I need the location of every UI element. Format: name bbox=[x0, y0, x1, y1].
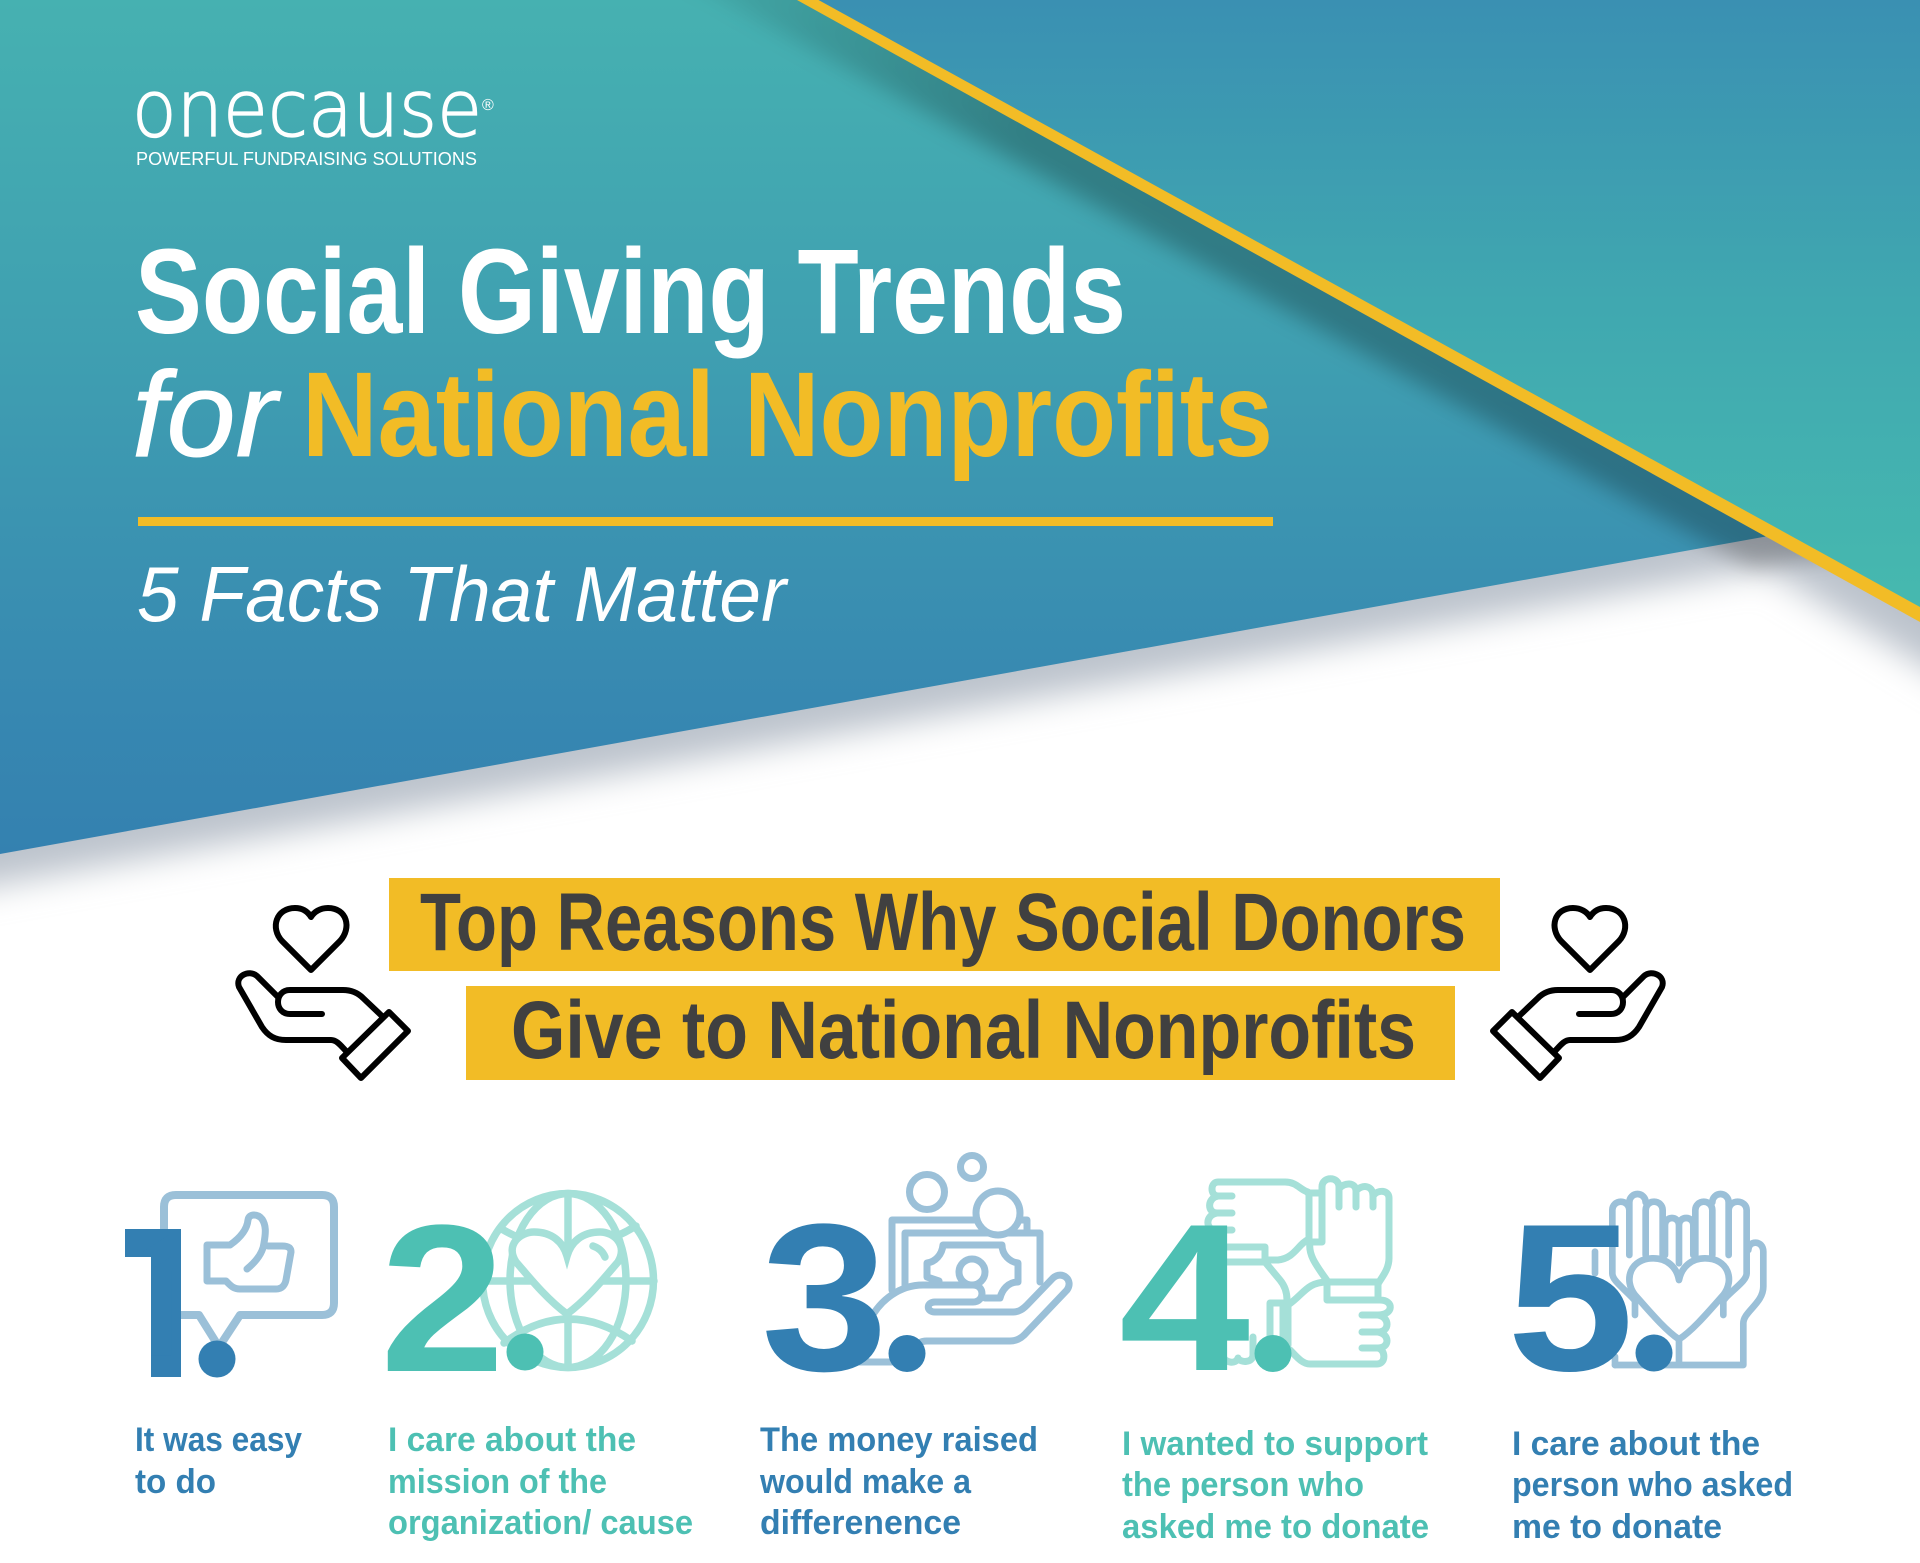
numeral 1: 1 bbox=[122, 1187, 239, 1422]
numeral 2: 2 bbox=[380, 1181, 505, 1416]
dot bbox=[1254, 1335, 1292, 1372]
caption: differenence bbox=[760, 1504, 961, 1542]
caption: me to donate bbox=[1512, 1508, 1722, 1546]
caption: would make a bbox=[759, 1463, 972, 1501]
caption: I care about the bbox=[1512, 1425, 1760, 1463]
icon: right hand with heart bbox=[1493, 908, 1663, 1078]
logo: POWERFUL FUNDRAISING SOLUTIONS bbox=[136, 148, 477, 169]
title: for bbox=[132, 346, 282, 482]
numeral 4: 4 bbox=[1119, 1180, 1250, 1415]
caption: I care about the bbox=[388, 1421, 636, 1459]
title: Social Giving Trends bbox=[135, 223, 1126, 359]
icon: four interlocked fists bbox=[1202, 1179, 1390, 1364]
caption: the person who bbox=[1122, 1466, 1364, 1504]
caption: mission of the bbox=[388, 1463, 607, 1501]
logo: ® bbox=[482, 97, 494, 114]
reason 5 bbox=[1507, 1180, 1793, 1546]
dot bbox=[1636, 1334, 1672, 1372]
caption bbox=[135, 1421, 302, 1501]
section heading: Top Reasons Why Social Donors bbox=[420, 877, 1466, 968]
caption: person who asked bbox=[1512, 1466, 1793, 1504]
title bbox=[132, 223, 1273, 482]
title rule bbox=[138, 517, 1273, 526]
reason 3 bbox=[759, 1156, 1069, 1542]
reason 4 bbox=[1119, 1179, 1429, 1546]
numeral 1 bbox=[125, 1229, 181, 1377]
shadow of the diagonal band bbox=[650, 0, 1900, 568]
caption: It was easy bbox=[135, 1421, 302, 1459]
reason 2 bbox=[380, 1181, 693, 1542]
caption: I wanted to support bbox=[1122, 1425, 1428, 1463]
section heading bbox=[389, 877, 1500, 1080]
icon: globe with heart bbox=[482, 1194, 654, 1368]
icon: open hands holding heart bbox=[1595, 1194, 1763, 1365]
icon: speech bubble with thumbs up bbox=[164, 1195, 334, 1347]
caption bbox=[388, 1421, 693, 1542]
caption: organization/ cause bbox=[388, 1504, 693, 1542]
header background panel bbox=[0, 0, 1920, 854]
dot bbox=[506, 1334, 544, 1370]
dot bbox=[198, 1340, 236, 1378]
caption: asked me to donate bbox=[1122, 1508, 1429, 1546]
section heading: Give to National Nonprofits bbox=[511, 985, 1416, 1076]
numeral 5: 5 bbox=[1507, 1180, 1634, 1415]
reason 1 bbox=[122, 1187, 334, 1501]
yellow diagonal band bbox=[797, 0, 1920, 622]
subtitle: 5 Facts That Matter bbox=[137, 550, 789, 638]
numeral 3: 3 bbox=[761, 1180, 888, 1415]
shadow under header bbox=[0, 0, 1920, 902]
caption bbox=[759, 1421, 1038, 1542]
icon: hand with money and coins bbox=[856, 1156, 1069, 1362]
logo: onecause bbox=[132, 65, 482, 155]
caption bbox=[1512, 1425, 1793, 1546]
icon: left hand with heart bbox=[238, 908, 408, 1078]
caption bbox=[1122, 1425, 1429, 1546]
caption: to do bbox=[135, 1463, 216, 1501]
title: National Nonprofits bbox=[302, 346, 1273, 482]
header top-right triangle bbox=[808, 0, 1920, 615]
caption: The money raised bbox=[760, 1421, 1038, 1459]
dot bbox=[888, 1335, 926, 1372]
